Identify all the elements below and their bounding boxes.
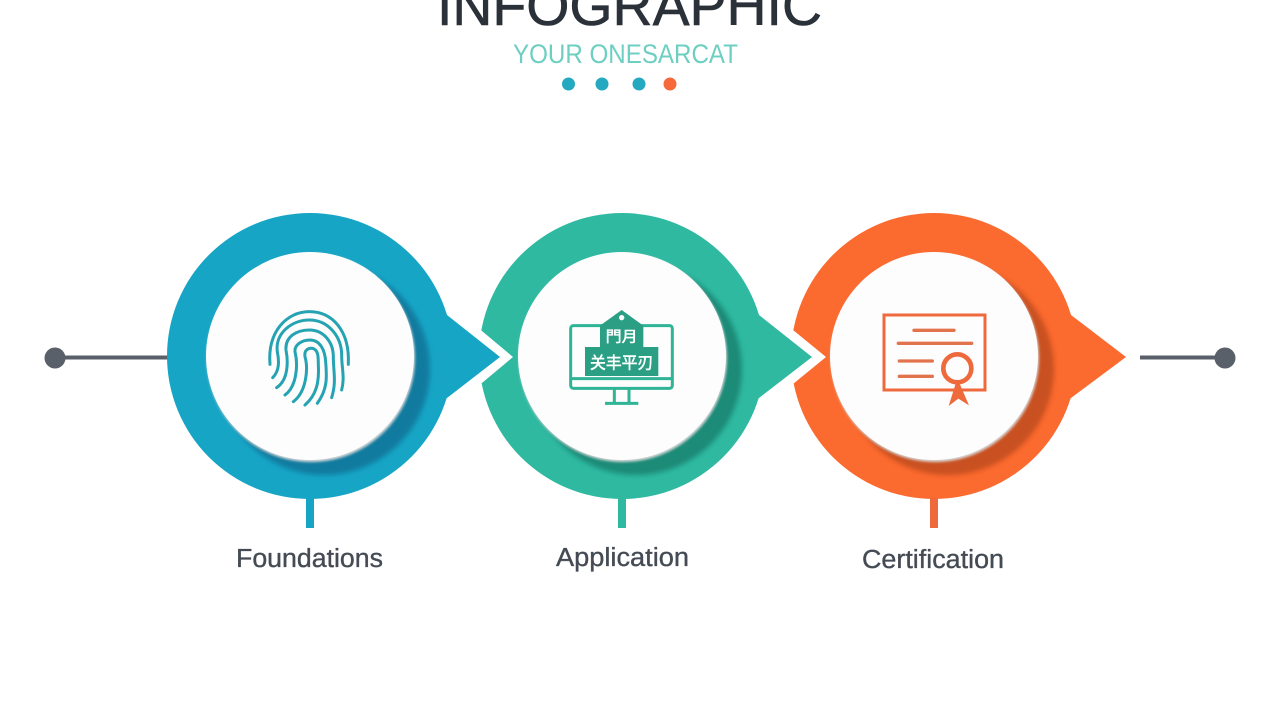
infographic canvas: [44, 0, 1236, 572]
blue ring with arrow: [167, 213, 500, 499]
label: foundations: Foundations: [236, 545, 383, 573]
right connector line with end dot: [1140, 348, 1236, 368]
decorative dots row: [562, 78, 676, 90]
step 3: certification: [782, 213, 1126, 574]
stem: [306, 498, 314, 528]
icon: monitor with building: 門月: [606, 330, 638, 346]
icon: monitor with building: [571, 310, 672, 403]
icon: monitor with building: 关丰平刃: [590, 353, 653, 372]
teal ring with arrow: [470, 213, 812, 499]
stem: [618, 498, 626, 528]
orange ring with arrow: [782, 213, 1126, 499]
white disc: [206, 252, 415, 462]
label: application: Application: [556, 544, 689, 572]
step 1: foundations: [167, 213, 500, 573]
icon: fingerprint: [270, 312, 348, 405]
step 2: application: [470, 213, 812, 572]
white disc: [830, 252, 1039, 462]
label: certification: Certification: [862, 546, 1004, 574]
stem: [930, 498, 938, 528]
white disc: [518, 252, 727, 462]
left connector line with end dot: [44, 348, 168, 368]
subtitle: YOUR ONESARCAT: [513, 39, 738, 69]
icon: certificate with seal: [884, 315, 985, 406]
